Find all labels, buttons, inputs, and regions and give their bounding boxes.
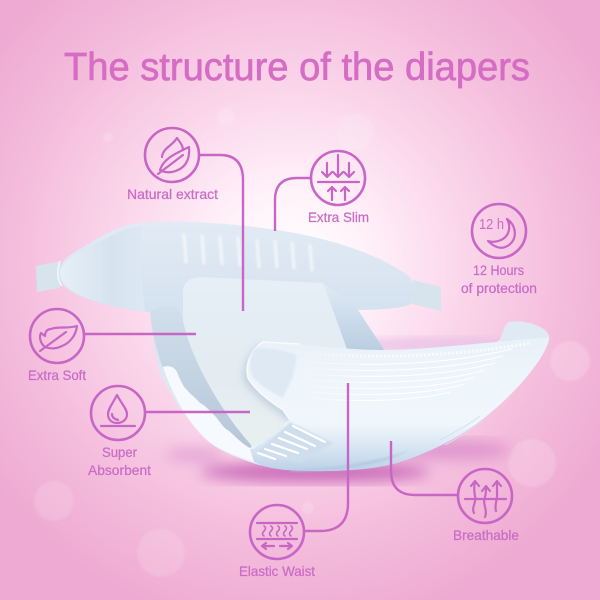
- connector: extra slim: [275, 178, 311, 231]
- feature: super absorbent: [88, 386, 151, 478]
- icon: leaf: [145, 128, 199, 182]
- feature: natural extract: [127, 128, 218, 202]
- icon: compression arrows: [311, 151, 365, 205]
- front right lip: [500, 321, 549, 342]
- feature: 12 hours of protection: of protection: [461, 280, 537, 296]
- flap edge highlight: [247, 342, 300, 420]
- flap contact shadow: [243, 345, 300, 424]
- front flap shade: [250, 348, 297, 398]
- elastic lines: [300, 343, 530, 401]
- label: Extra Soft: [28, 367, 86, 383]
- feature: extra soft: [28, 309, 86, 383]
- label: Natural extract: [127, 186, 218, 202]
- back stitches: [184, 235, 312, 270]
- right tape: [412, 280, 441, 311]
- front pleats: [258, 426, 325, 459]
- label: 12 Hours: [473, 262, 524, 278]
- icon: feather: [30, 309, 84, 363]
- connector: natural extract: [199, 155, 243, 311]
- icon: elastic layers: [250, 505, 304, 559]
- label: Super: [102, 444, 137, 460]
- title: The structure of the diapers: [64, 46, 530, 89]
- feature: elastic waist: [239, 505, 315, 579]
- diaper illustration: [36, 222, 549, 471]
- pleat zone: [256, 422, 333, 463]
- bokeh lights: [34, 108, 590, 577]
- label: Elastic Waist: [239, 563, 315, 579]
- connector: breathable: [391, 441, 458, 495]
- connector: super absorbent: [146, 411, 250, 413]
- label: Breathable: [453, 527, 519, 543]
- icon: droplet: [91, 386, 145, 440]
- icon: moon with 12 h: 12 h: [479, 216, 504, 233]
- inner grey band: [150, 306, 252, 450]
- right-side fold lines: [440, 416, 484, 445]
- side strip: [323, 283, 385, 351]
- label: Extra Slim: [308, 209, 369, 225]
- absorbent pad: [183, 277, 350, 446]
- feature: extra slim: [308, 151, 369, 225]
- front panel: [247, 321, 549, 471]
- rear shell silhouette: [58, 222, 415, 470]
- feature: 12 hours of protection: [461, 204, 537, 296]
- icon: airflow arrows: [458, 469, 512, 523]
- feature: super absorbent: Absorbent: [88, 462, 151, 478]
- leg ruffle: [163, 366, 256, 462]
- wing highlight edge: [58, 261, 62, 286]
- connector: elastic waist: [305, 383, 348, 531]
- connector: extra soft: [84, 333, 196, 335]
- bottom shading: [290, 450, 410, 471]
- feature: breathable: [453, 469, 519, 543]
- left tape: [36, 261, 60, 292]
- diaper shadow: [165, 337, 530, 482]
- left wing panel: [60, 226, 145, 311]
